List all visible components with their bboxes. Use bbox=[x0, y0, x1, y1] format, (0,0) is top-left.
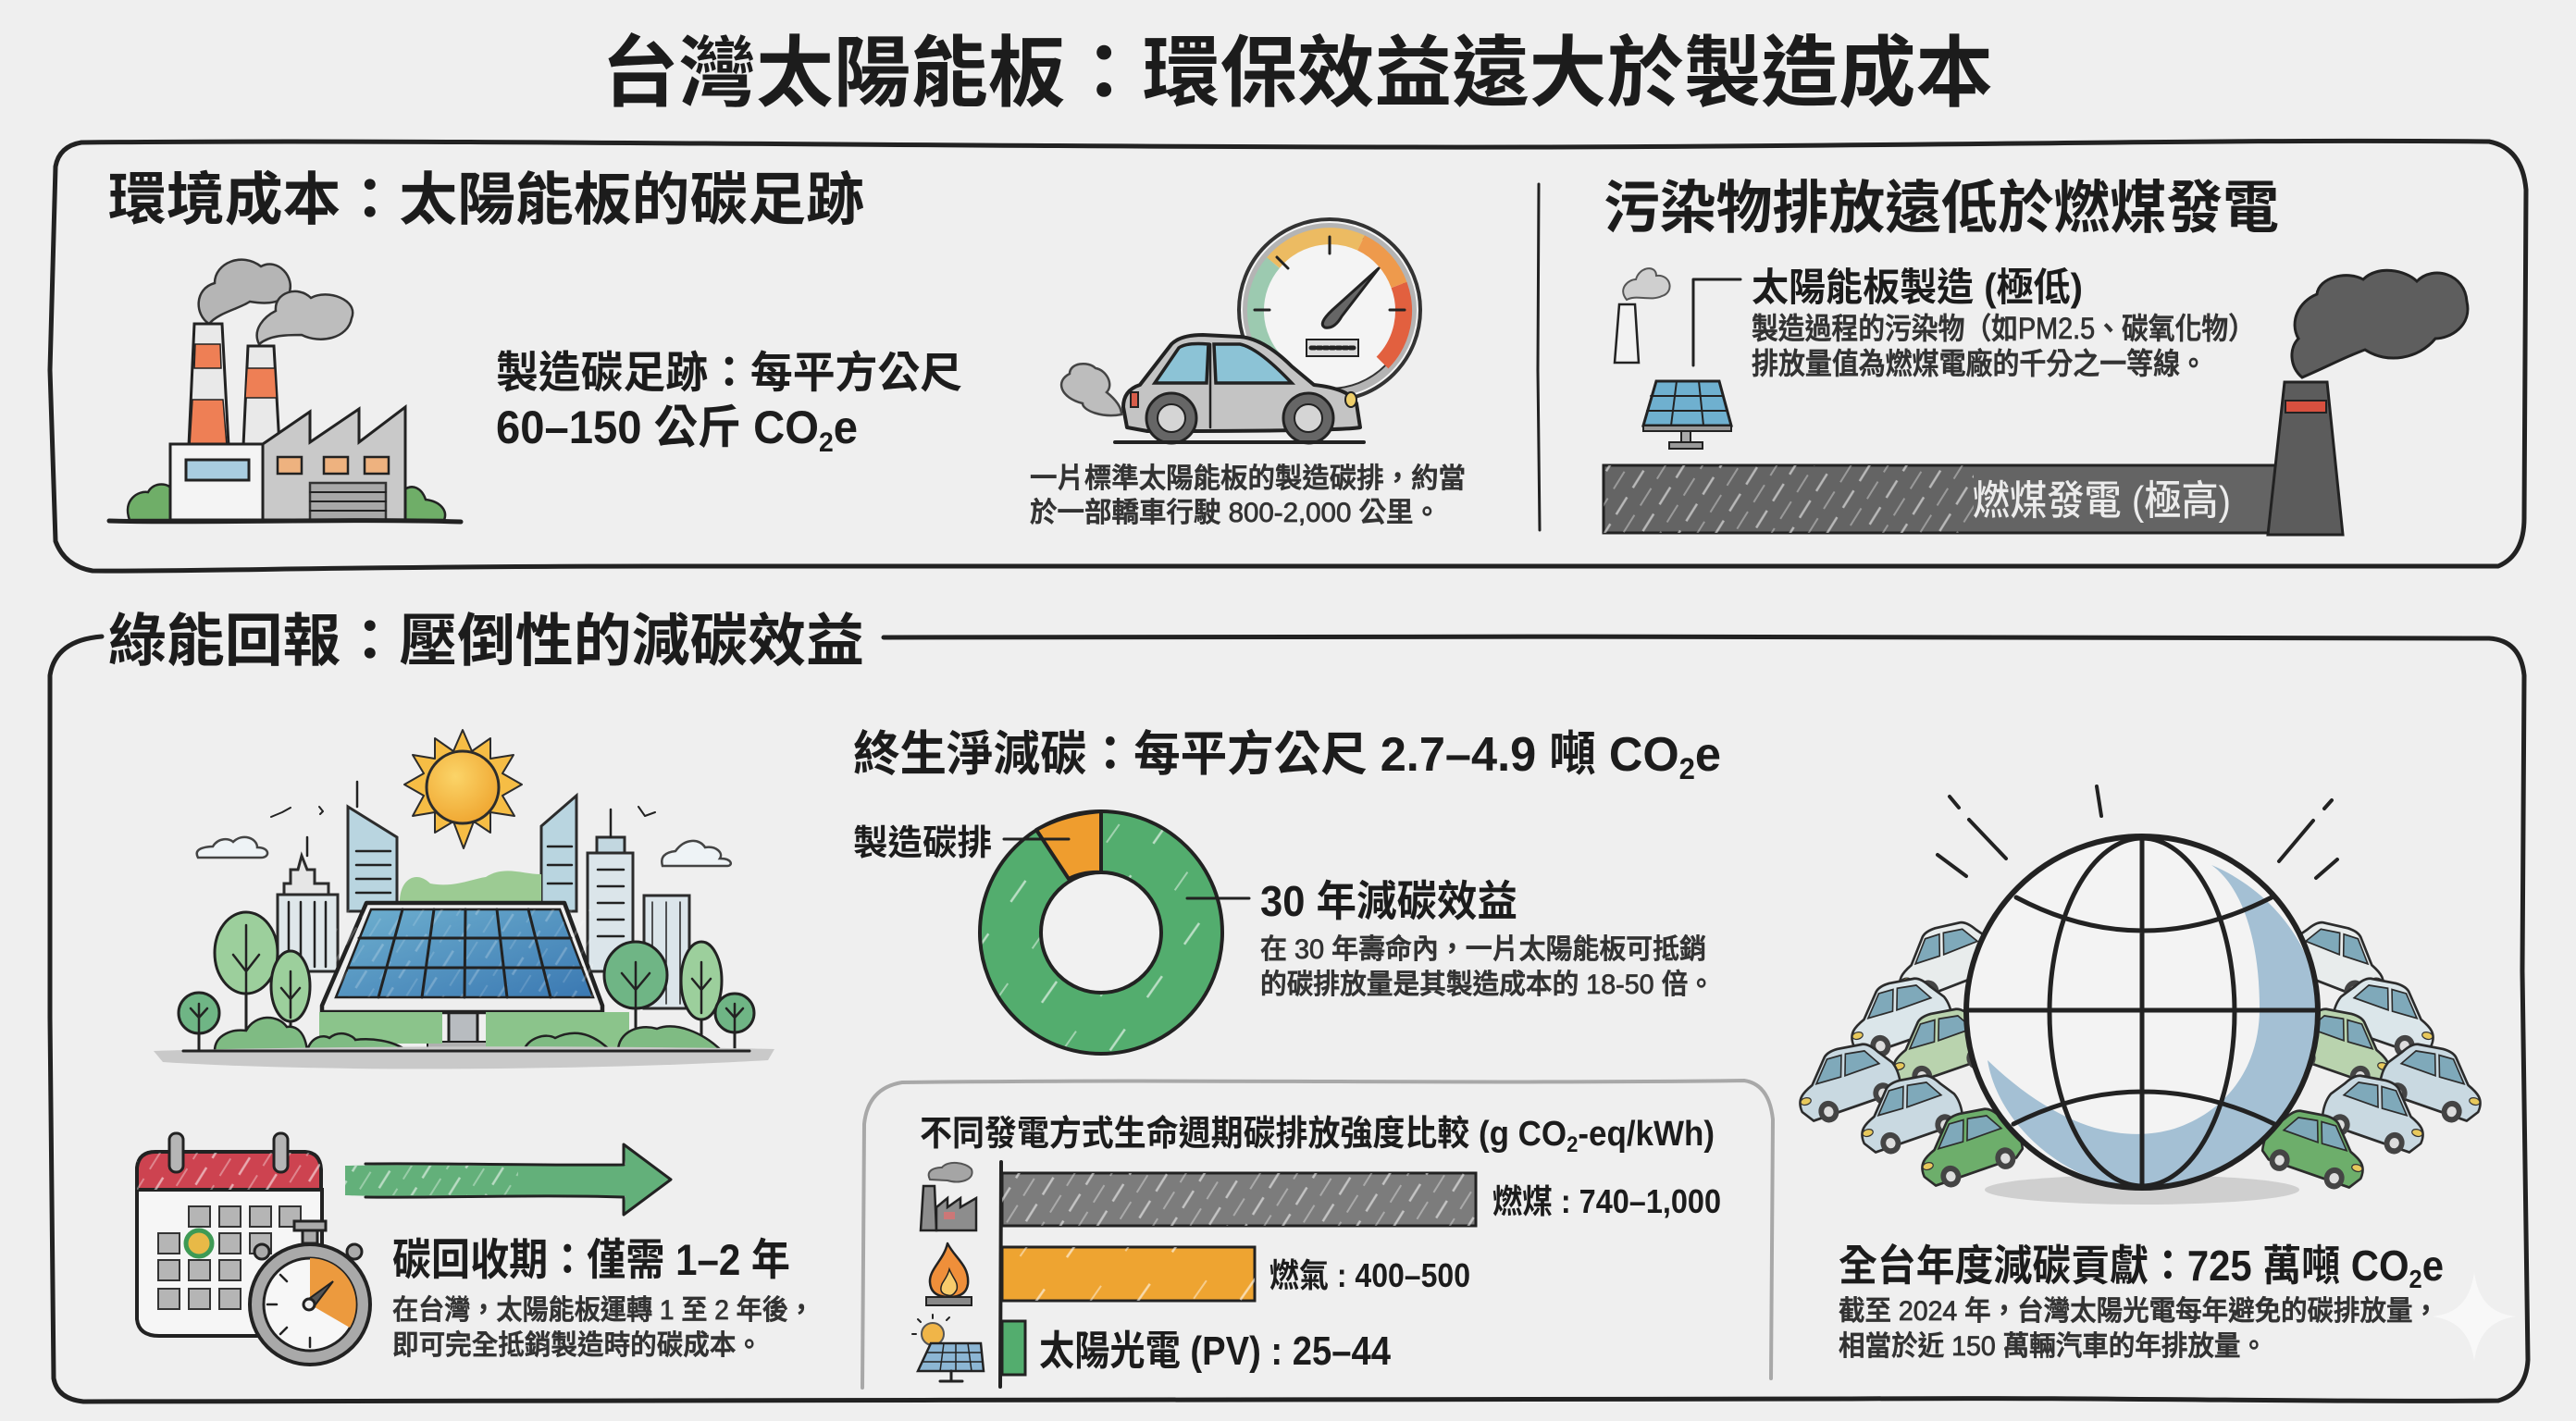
text: 30-year benefit: 在 30 年壽命內，一片太陽能板可抵銷 bbox=[1260, 934, 1706, 965]
buildings bbox=[278, 782, 689, 1008]
text: car comparison: 一片標準太陽能板的製造碳排，約當 bbox=[1030, 463, 1466, 494]
chart title: -eq/kWh) bbox=[1578, 1115, 1715, 1154]
chart title: 2 bbox=[1567, 1132, 1578, 1157]
heading: lifetime reduction: e bbox=[1695, 728, 1721, 782]
icon: sparkle watermark bbox=[2433, 1272, 2516, 1361]
clouds and birds bbox=[197, 807, 731, 866]
title: 台灣太陽能板：環保效益遠大於製造成本 bbox=[601, 30, 1993, 117]
panel: environmental cost bbox=[50, 141, 2526, 571]
bar: gas: 燃氣 : 400–500 bbox=[1269, 1256, 1470, 1294]
text: payback: 在台灣，太陽能板運轉 1 至 2 年後， bbox=[392, 1295, 814, 1326]
text: car comparison: 於一部轎車行駛 800-2,000 公里。 bbox=[1030, 498, 1441, 528]
icon: solar with sun bbox=[912, 1315, 984, 1381]
bar: coal power high bbox=[1604, 465, 2279, 533]
icon: factory bbox=[109, 260, 461, 522]
icon: car with exhaust bbox=[1061, 335, 1364, 443]
arrow: payback bbox=[345, 1144, 671, 1215]
text: 30-year benefit: 的碳排放量是其製造成本的 18-50 倍。 bbox=[1260, 970, 1715, 1000]
panel: green return bbox=[50, 610, 2528, 1402]
trees and bushes bbox=[179, 912, 754, 1053]
text: annual reduction: 相當於近 150 萬輛汽車的年排放量。 bbox=[1839, 1331, 2267, 1362]
cars left bbox=[1788, 912, 2028, 1194]
icon: sun bbox=[404, 730, 522, 848]
illustration: globe with cars bbox=[1788, 786, 2493, 1205]
rays bbox=[1938, 786, 2337, 878]
icon: flame bbox=[926, 1243, 972, 1305]
text: solar manufacturing low: 排放量值為燃煤電廠的千分之一等線。 bbox=[1752, 347, 2207, 380]
text: manufacturing footprint value: e bbox=[834, 402, 858, 453]
text: payback: 即可完全抵銷製造時的碳成本。 bbox=[392, 1330, 762, 1361]
icon: coal chimney with smoke bbox=[2268, 270, 2468, 535]
heading: carbon footprint: 環境成本：太陽能板的碳足跡 bbox=[108, 168, 864, 232]
text: manufacturing footprint: 製造碳足跡：每平方公尺 bbox=[496, 348, 962, 397]
label: manufacturing emissions: 製造碳排 bbox=[853, 824, 992, 863]
heading: lifetime reduction: 2 bbox=[1679, 752, 1695, 785]
bar: solar: 太陽光電 (PV) : 25–44 bbox=[1039, 1328, 1391, 1374]
text: payback: 碳回收期：僅需 1–2 年 bbox=[392, 1235, 790, 1284]
text: annual reduction: 2 bbox=[2409, 1265, 2422, 1293]
illustration: solar city bbox=[154, 730, 774, 1069]
text: solar manufacturing low: 製造過程的污染物（如PM2.5、碳氧化物） bbox=[1752, 312, 2255, 345]
icon: globe bbox=[1966, 836, 2318, 1188]
chart: donut bbox=[980, 811, 1249, 1054]
ground bbox=[154, 1046, 774, 1069]
bar: coal: 燃煤 : 740–1,000 bbox=[1492, 1182, 1721, 1220]
chart title: 不同發電方式生命週期碳排放強度比較 (g CO bbox=[920, 1115, 1623, 1154]
panel: intensity comparison chart bbox=[862, 1081, 1773, 1388]
text: annual reduction: 全台年度減碳貢獻：725 萬噸 CO bbox=[1839, 1242, 2465, 1290]
text: 30-year benefit: 30 年減碳效益 bbox=[1260, 877, 1517, 925]
bar: gas bbox=[1002, 1247, 1470, 1301]
icon: solar panel bbox=[322, 903, 602, 1052]
text: manufacturing footprint value: 2 bbox=[819, 427, 834, 458]
heading: lifetime reduction: 終生淨減碳：每平方公尺 2.7–4.9 噸 CO bbox=[853, 728, 1703, 782]
text: solar manufacturing low: 太陽能板製造 (極低) bbox=[1752, 266, 2083, 309]
text: annual reduction: 截至 2024 年，台灣太陽光電每年避免的碳排放量， bbox=[1839, 1296, 2439, 1327]
bar: coal bbox=[1002, 1173, 1721, 1226]
heading: green return: 綠能回報：壓倒性的減碳效益 bbox=[108, 610, 864, 673]
bar: coal power high: 燃煤發電 (極高) bbox=[1973, 478, 2231, 524]
text: annual reduction: e bbox=[2422, 1242, 2444, 1290]
heading: pollutants: 污染物排放遠低於燃煤發電 bbox=[1604, 177, 2279, 241]
text: solar manufacturing low bbox=[1752, 266, 2255, 380]
text: payback bbox=[392, 1235, 814, 1361]
icon: coal factory bbox=[921, 1163, 976, 1230]
bar: solar bbox=[1002, 1321, 1391, 1375]
text: 30-year benefit bbox=[1260, 877, 1715, 1000]
icon: small chimney with panel bbox=[1615, 268, 1740, 449]
icon: gauge bbox=[1239, 219, 1420, 401]
text: car comparison bbox=[1030, 463, 1466, 528]
icon: calendar with stopwatch bbox=[137, 1133, 370, 1365]
text: manufacturing footprint value: 60–150 公斤 CO bbox=[496, 402, 838, 453]
cars right bbox=[2257, 912, 2493, 1196]
text: annual reduction bbox=[1839, 1242, 2444, 1362]
